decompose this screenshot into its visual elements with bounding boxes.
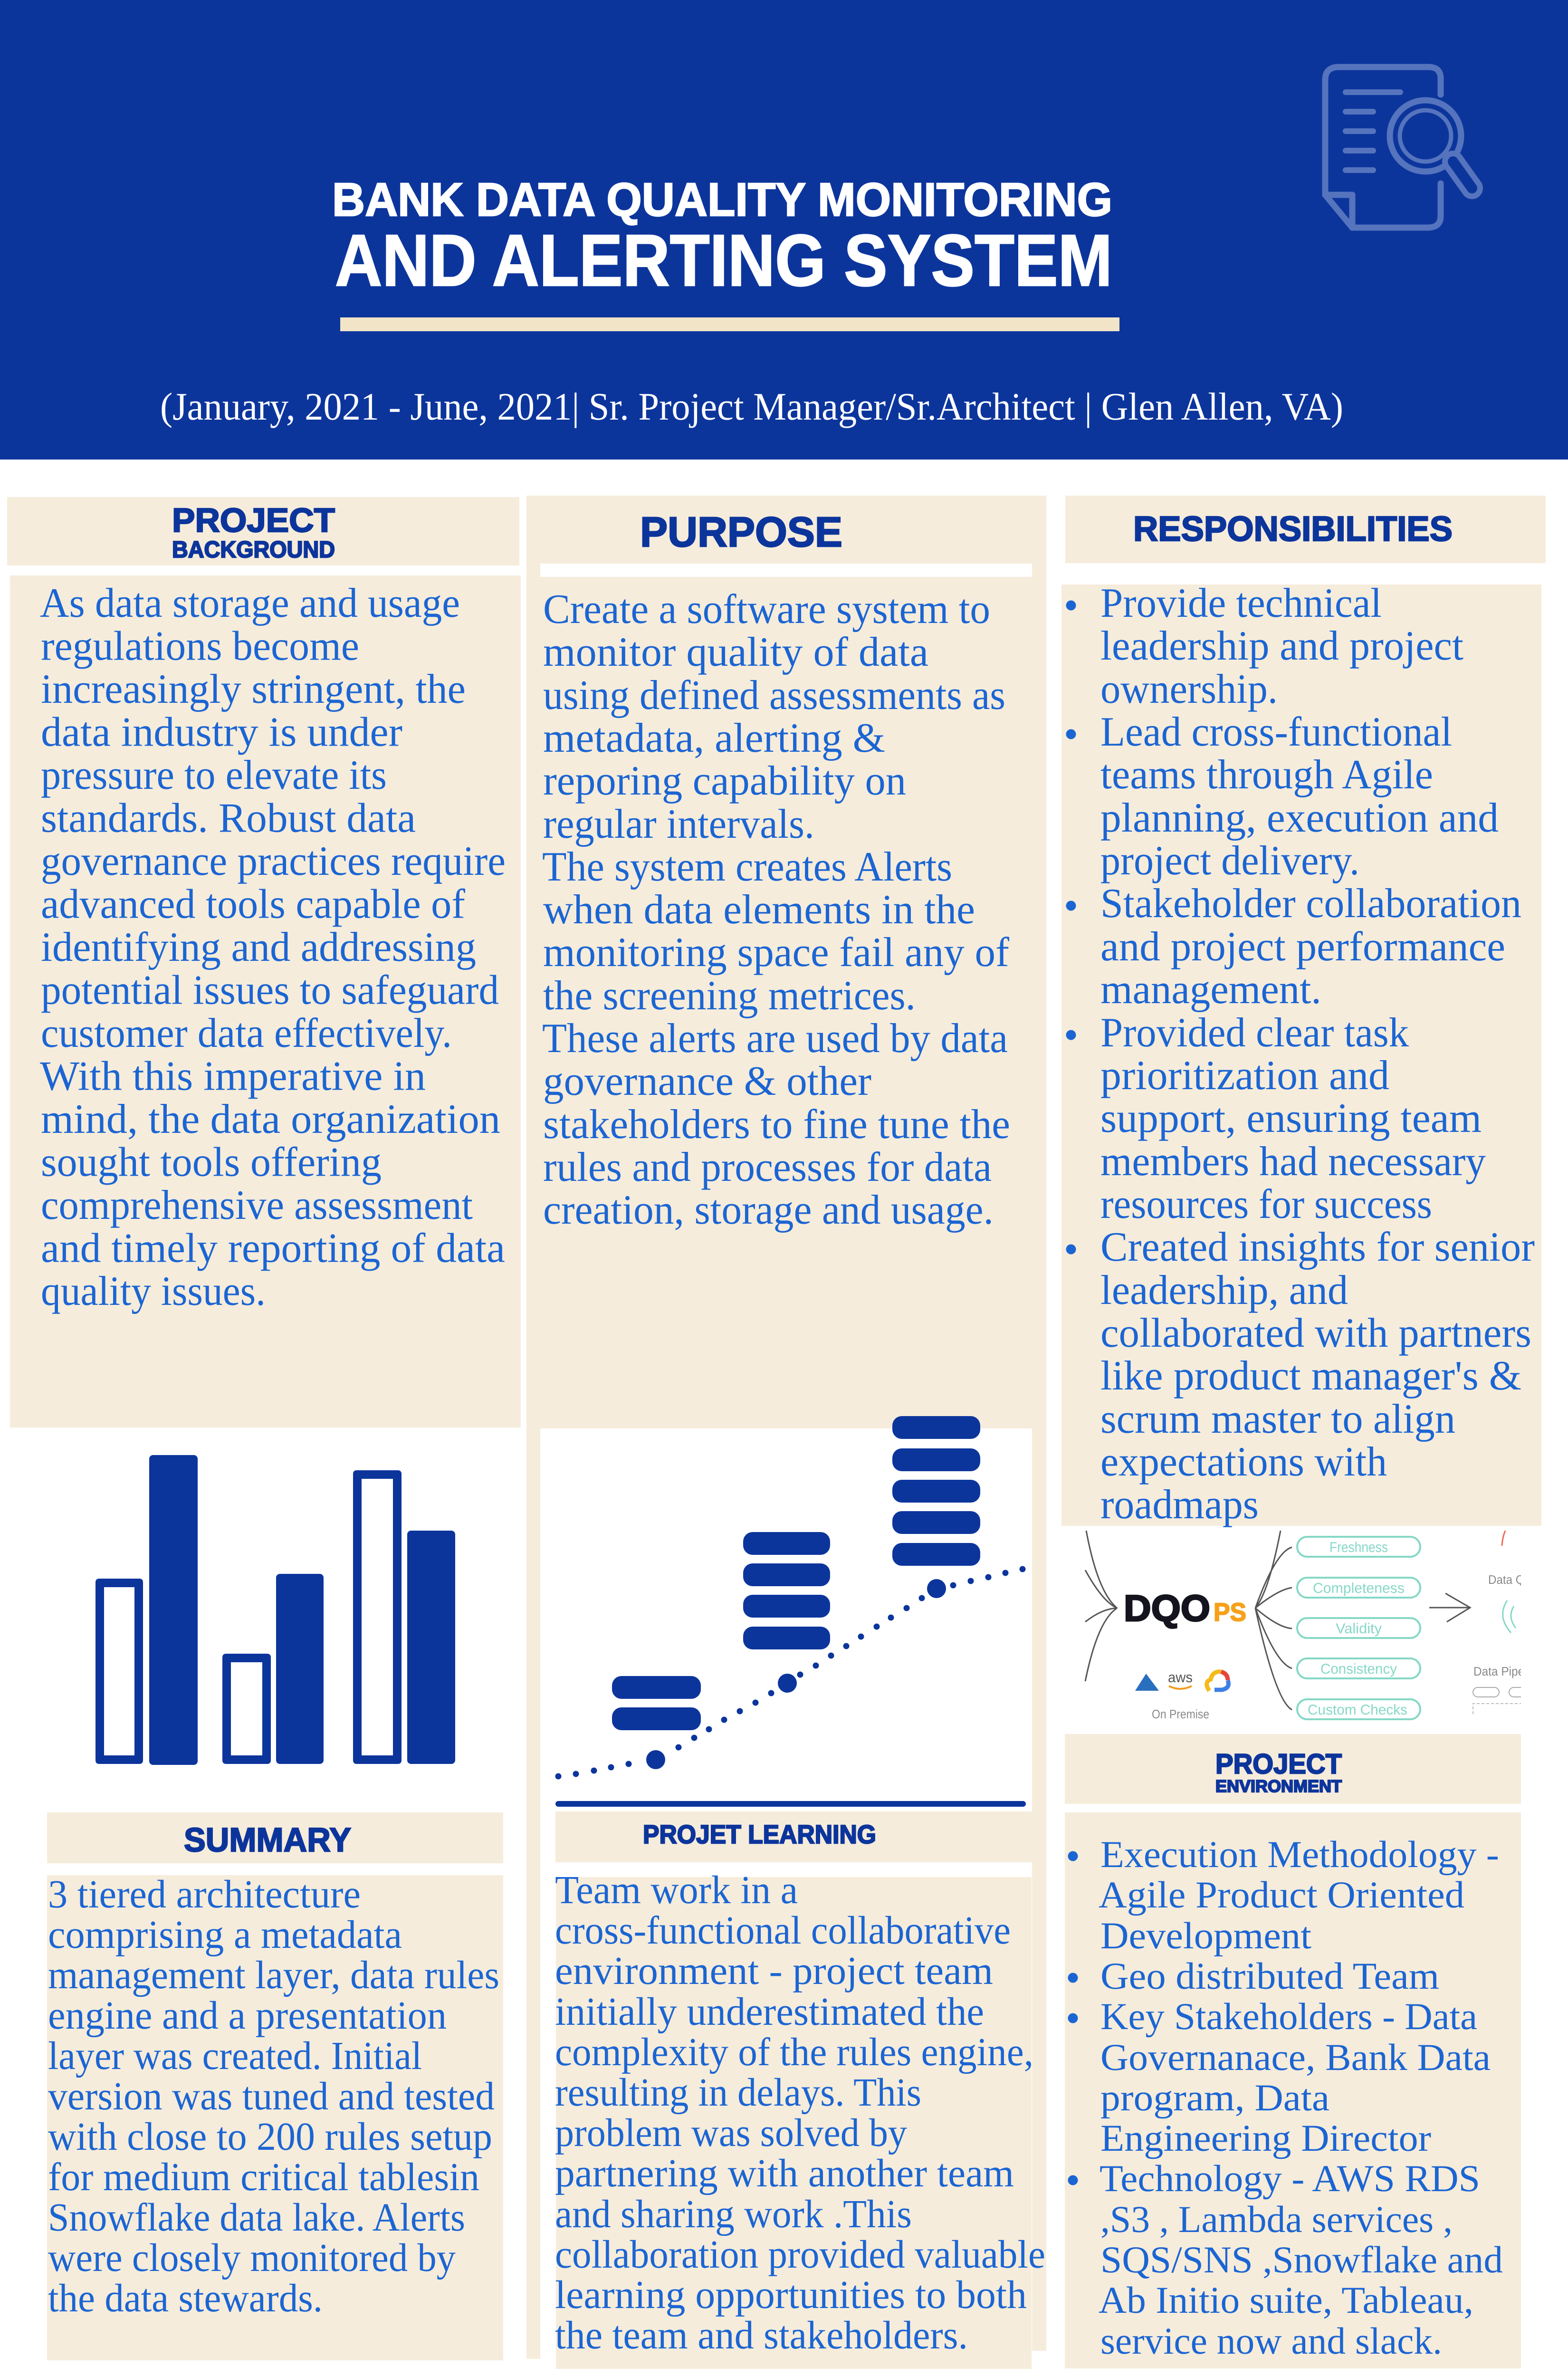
cropped right side of diagram: Data Pipeli (1473, 1664, 1530, 1678)
text block: project learning (555, 1868, 1045, 2369)
icon: bar chart (96, 1455, 455, 1765)
cloud logos (1135, 1670, 1229, 1691)
header banner (0, 0, 1568, 460)
text block: project learning: the team and stakeholders. (555, 2313, 968, 2357)
text block: project background: mind, the data organization (41, 1096, 500, 1142)
text block: summary (47, 1872, 503, 2360)
text block: project learning: complexity of the rules engine, (555, 2030, 1033, 2074)
list: project environment: Agile Product Oriented (1099, 1874, 1464, 1916)
text block: purpose: rules and processes for data (543, 1144, 992, 1190)
text block: project background: and timely reporting of data (41, 1225, 505, 1272)
text block: purpose: when data elements in the (543, 887, 975, 933)
list: project environment: program, Data (1100, 2077, 1329, 2119)
text block: project learning: and sharing work .This (555, 2192, 912, 2236)
logo: DQOps: DQO (1124, 1587, 1210, 1629)
list: responsibilities: roadmaps (1100, 1482, 1259, 1528)
text block: project background: identifying and addressing (41, 924, 476, 970)
text block: purpose: Create a software system to (543, 586, 990, 632)
connector lines (1085, 1531, 1292, 1710)
text block: project background: quality issues. (41, 1268, 266, 1314)
list: responsibilities: Lead cross-functional (1100, 709, 1452, 755)
list: responsibilities: leadership and project (1100, 623, 1463, 669)
subtitle: dates, role, location: (January, 2021 - June, 2021| Sr. Project Manager/Sr.Architect | Glen Allen, VA) (160, 385, 1343, 428)
text block: purpose: using defined assessments as (543, 672, 1005, 719)
text block: summary: engine and a presentation (48, 1993, 447, 2038)
text block: purpose: The system creates Alerts (542, 844, 952, 890)
pills: quality dimensions (1297, 1537, 1420, 1719)
cloud logos: aws (1168, 1670, 1193, 1686)
list: project environment: service now and slack. (1100, 2320, 1442, 2362)
list: responsibilities: members had necessary (1100, 1139, 1486, 1185)
text block: project background: comprehensive assessment (41, 1182, 473, 1228)
text block: project background (10, 575, 521, 1428)
list: responsibilities: leadership, and (1100, 1267, 1348, 1313)
list: project environment: ,S3 , Lambda services , (1100, 2199, 1453, 2241)
text block: project learning: resulting in delays. This (555, 2070, 921, 2115)
text block: project background: customer data effectively. (41, 1010, 452, 1056)
title: AND ALERTING SYSTEM (335, 220, 1112, 301)
list: responsibilities: project delivery. (1100, 838, 1359, 884)
panel: responsibilities (1061, 496, 1546, 1528)
list: responsibilities: resources for success (1100, 1181, 1432, 1227)
text block: summary: management layer, data rules (48, 1953, 499, 1997)
list: responsibilities: planning, execution and (1100, 795, 1499, 841)
text block: project background: regulations become (41, 623, 359, 669)
text block: project background: As data storage and usage (40, 580, 460, 626)
text block: purpose (542, 586, 1010, 1233)
heading: project environment (1065, 1734, 1521, 1804)
list: responsibilities: support, ensuring team (1100, 1095, 1482, 1141)
list: project environment: Technology - AWS RDS (1100, 2158, 1480, 2200)
list: project environment: Governanace, Bank Data (1100, 2037, 1491, 2079)
chart: stacked coins with dotted growth line (555, 1416, 1026, 1807)
text block: purpose: metadata, alerting & (543, 715, 885, 761)
list: responsibilities: management. (1100, 967, 1321, 1013)
list: responsibilities: like product manager's & (1100, 1353, 1521, 1399)
text block: project background: advanced tools capable of (41, 881, 466, 928)
panel: project background (7, 497, 521, 1428)
heading: project background: PROJECT (172, 502, 335, 539)
heading: project background: BACKGROUND (172, 537, 335, 563)
text block: project background: pressure to elevate its (41, 752, 387, 798)
list: responsibilities (1061, 580, 1541, 1528)
title (332, 173, 1112, 301)
text block: project learning: cross-functional collaborative (555, 1908, 1011, 1953)
list: responsibilities: ownership. (1100, 666, 1278, 712)
text block: purpose: governance & other (543, 1058, 871, 1104)
heading: summary (47, 1812, 503, 1863)
text block: project background: With this imperative in (40, 1053, 426, 1100)
list: project environment: Development (1100, 1915, 1311, 1957)
panel: project environment (1065, 1734, 1521, 2368)
text block: summary: with close to 200 rules setup (48, 2115, 492, 2159)
text block: purpose: the screening metrices. (543, 973, 916, 1019)
panel: purpose column background (526, 496, 1046, 2359)
heading: project environment: PROJECT (1215, 1748, 1342, 1780)
text block: project background: increasingly stringent, the (41, 666, 466, 712)
text block: project learning: problem was solved by (555, 2111, 907, 2155)
arrow (1429, 1593, 1470, 1622)
panel: summary (47, 1812, 503, 2360)
cropped right side of diagram: Data Qu (1488, 1572, 1531, 1587)
list: project environment: Ab Initio suite, Tableau, (1099, 2280, 1473, 2321)
cropped right side of diagram (1473, 1531, 1533, 1714)
list: responsibilities: collaborated with partners (1100, 1310, 1531, 1356)
text block: project background: sought tools offering (41, 1140, 382, 1185)
heading: responsibilities (1065, 496, 1546, 563)
heading: project background (7, 497, 519, 565)
list: responsibilities: Created insights for senior (1100, 1224, 1535, 1270)
list: responsibilities: expectations with (1100, 1439, 1387, 1485)
diagram: DQOps data quality: Freshness (1329, 1540, 1388, 1555)
icon: document with magnifier (1325, 67, 1472, 228)
list: project environment: Engineering Director (1100, 2117, 1431, 2159)
text block: purpose: monitor quality of data (543, 629, 928, 675)
diagram: DQOps data quality: Validity (1336, 1621, 1382, 1637)
list: responsibilities: scrum master to align (1100, 1396, 1455, 1442)
list: project environment: Geo distributed Team (1100, 1955, 1439, 1997)
title: BANK DATA QUALITY MONITORING (332, 173, 1112, 226)
diagram: DQOps data quality (1084, 1531, 1521, 1720)
text block: project learning: environment - project team (555, 1949, 993, 1993)
text block: summary: the data stewards. (48, 2276, 323, 2320)
text block: project learning: partnering with another team (555, 2151, 1014, 2195)
list: project environment: SQS/SNS ,Snowflake and (1100, 2239, 1503, 2281)
panel: project learning (555, 1811, 1045, 2369)
heading: project learning: PROJET LEARNING (643, 1820, 876, 1849)
list: responsibilities: Provide technical (1100, 580, 1382, 626)
text block: project background: governance practices require (41, 838, 506, 884)
list: responsibilities: prioritization and (1100, 1053, 1389, 1099)
heading: project learning (555, 1811, 1032, 1862)
text block: purpose: regular intervals. (543, 801, 814, 847)
list: project environment (1065, 1812, 1521, 2368)
text block: purpose: stakeholders to fine tune the (543, 1102, 1010, 1148)
list: responsibilities: Provided clear task (1100, 1010, 1409, 1056)
text block: summary: Snowflake data lake. Alerts (48, 2195, 465, 2240)
list: responsibilities: and project performance (1100, 924, 1505, 970)
list: project environment: Execution Methodology - (1100, 1834, 1499, 1876)
text block: project background: potential issues to safeguard (41, 968, 499, 1013)
diagram: DQOps data quality: PS (1214, 1598, 1246, 1627)
text block: project background: data industry is under (41, 709, 402, 756)
heading: summary: SUMMARY (184, 1821, 351, 1859)
text block: summary: comprising a metadata (48, 1913, 402, 1957)
text block: project learning: learning opportunities to both (555, 2273, 1027, 2317)
text block: summary: layer was created. Initial (48, 2034, 422, 2078)
heading: project environment: ENVIRONMENT (1215, 1776, 1342, 1796)
text block: project background: standards. Robust data (41, 795, 416, 841)
list: responsibilities: Stakeholder collaboration (1100, 881, 1521, 927)
text block: purpose: creation, storage and usage. (543, 1187, 994, 1233)
list: responsibilities: teams through Agile (1100, 752, 1433, 798)
caption: on premise: On Premise (1152, 1707, 1209, 1721)
text block: project learning: collaboration provided valuable (555, 2232, 1045, 2277)
text block: purpose: These alerts are used by data (542, 1016, 1008, 1062)
text block: summary: 3 tiered architecture (48, 1872, 361, 1916)
text block: summary: version was tuned and tested (48, 2074, 495, 2118)
text block: summary: were closely monitored by (48, 2236, 456, 2280)
text block: project learning: Team work in a (555, 1868, 798, 1912)
text block: summary: for medium critical tablesin (48, 2155, 479, 2199)
heading: responsibilities: RESPONSIBILITIES (1133, 509, 1453, 548)
heading: purpose: PURPOSE (640, 508, 842, 556)
diagram: DQOps data quality: Consistency (1320, 1661, 1397, 1677)
text block: purpose: reporing capability on (543, 758, 906, 804)
diagram: DQOps data quality: Completeness (1313, 1581, 1405, 1596)
title underline (340, 317, 1119, 331)
text block: project learning: initially underestimated the (555, 1990, 984, 2034)
text block: purpose: monitoring space fail any of (543, 929, 1010, 976)
list: project environment: Key Stakeholders - Data (1100, 1996, 1477, 2038)
diagram: DQOps data quality: Custom Checks (1308, 1702, 1407, 1718)
